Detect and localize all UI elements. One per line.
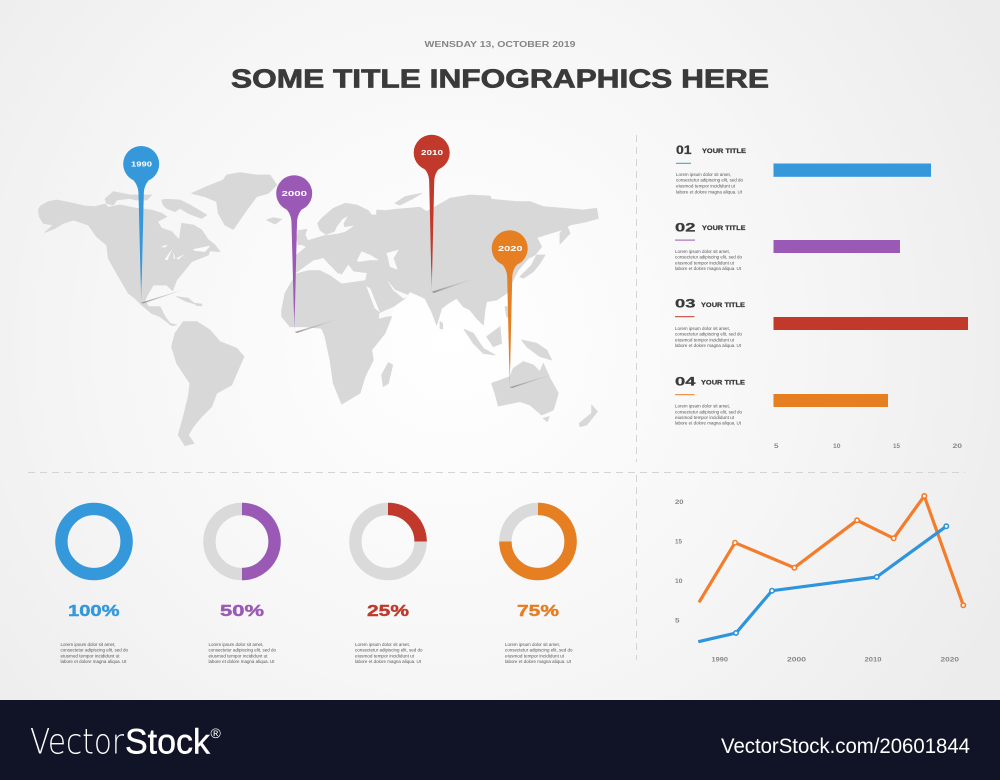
row 02: consectetur adipiscing elit, sed do bbox=[675, 255, 742, 260]
row 03: YOUR TITLE bbox=[701, 302, 746, 309]
row 02: labore et dolore magna aliqua. Ut bbox=[675, 266, 742, 271]
y axis labels: 5 bbox=[675, 618, 680, 624]
y axis labels: 10 bbox=[675, 579, 683, 585]
row 04: 04 bbox=[675, 376, 696, 388]
y axis labels bbox=[675, 500, 684, 624]
donut: 100%: Lorem ipsum dolor sit amet, bbox=[60, 642, 116, 647]
row 03: labore et dolore magna aliqua. Ut bbox=[675, 343, 742, 348]
donut: 50%: labore et dolore magna aliqua. Ut bbox=[208, 659, 275, 664]
y axis labels: 15 bbox=[675, 540, 683, 546]
footer id: VectorStock.com/20601844 bbox=[721, 735, 970, 758]
row 03: consectetur adipiscing elit, sed do bbox=[675, 332, 742, 337]
donut: 50%: consectetur adipiscing elit, sed do bbox=[208, 648, 276, 653]
footer logo: Vector bbox=[30, 722, 125, 762]
donut: 100% bbox=[60, 509, 128, 664]
row 02: eiusmod tempor incididunt ut bbox=[675, 260, 735, 265]
row 01: eiusmod tempor incididunt ut bbox=[676, 183, 736, 188]
row 02: YOUR TITLE bbox=[702, 225, 746, 232]
americas and greenland bbox=[38, 173, 282, 446]
donut: 50% bbox=[208, 509, 276, 664]
x axis labels: 2010 bbox=[864, 658, 882, 664]
donut: 25%: eiusmod tempor incididunt ut bbox=[355, 653, 415, 658]
pin: 2010: 2010 bbox=[421, 148, 443, 157]
pin: 2020: 2020 bbox=[498, 244, 522, 253]
orange series bbox=[699, 494, 966, 608]
eurasia africa and oceania bbox=[282, 193, 598, 427]
donut: 75% bbox=[505, 509, 573, 664]
row 01: labore et dolore magna aliqua. Ut bbox=[676, 189, 743, 194]
footer logo: Stock bbox=[125, 722, 210, 761]
donut: 100%: consectetur adipiscing elit, sed do bbox=[60, 648, 128, 653]
donut: 100%: labore et dolore magna aliqua. Ut bbox=[60, 659, 127, 664]
row 04: Lorem ipsum dolor sit amet, bbox=[675, 403, 730, 408]
donut: 25%: 25% bbox=[367, 603, 410, 620]
eurasia and africa landmass bbox=[282, 195, 598, 404]
title: SOME TITLE INFOGRAPHICS HERE bbox=[231, 65, 769, 93]
bar axis: 20 bbox=[952, 444, 963, 450]
blue series bbox=[698, 524, 948, 642]
donut: 50%: 50% bbox=[220, 603, 265, 620]
row 01: consectetur adipiscing elit, sed do bbox=[676, 178, 743, 183]
footer logo bbox=[30, 722, 222, 762]
row 03: Lorem ipsum dolor sit amet, bbox=[675, 326, 730, 331]
row 01: 01 bbox=[676, 145, 692, 157]
footer bar bbox=[0, 700, 1000, 780]
x axis labels: 2000 bbox=[787, 658, 807, 664]
inland seas bbox=[296, 217, 410, 318]
donut: 25%: Lorem ipsum dolor sit amet, bbox=[355, 642, 410, 647]
date line: WENSDAY 13, OCTOBER 2019 bbox=[424, 40, 576, 49]
row 01 bbox=[676, 145, 931, 194]
donut: 25%: consectetur adipiscing elit, sed do bbox=[355, 648, 423, 653]
donut: 75%: consectetur adipiscing elit, sed do bbox=[505, 648, 573, 653]
donut: 75%: 75% bbox=[517, 603, 560, 620]
x axis labels: 2020 bbox=[940, 658, 960, 664]
bar axis: 5 bbox=[774, 444, 779, 450]
footer logo: ® bbox=[210, 725, 222, 741]
pin: 2000: 2000 bbox=[282, 189, 307, 198]
x axis labels: 1990 bbox=[712, 658, 729, 664]
donut: 25%: labore et dolore magna aliqua. Ut bbox=[355, 659, 422, 664]
donut: 25% bbox=[355, 509, 423, 664]
pin: 1990 bbox=[123, 146, 159, 303]
pin: 2010 bbox=[414, 135, 450, 292]
bar axis bbox=[774, 444, 963, 450]
pin: 2020 bbox=[492, 230, 528, 387]
y axis labels: 20 bbox=[675, 500, 684, 506]
pin shadows bbox=[141, 278, 552, 388]
pin: 1990: 1990 bbox=[131, 160, 152, 168]
row 04: eiusmod tempor incididunt ut bbox=[675, 415, 735, 420]
bar axis: 10 bbox=[833, 444, 841, 450]
row 02: 02 bbox=[675, 222, 696, 234]
row 04: labore et dolore magna aliqua. Ut bbox=[675, 421, 742, 426]
row 03: eiusmod tempor incididunt ut bbox=[675, 337, 735, 342]
donut: 100%: eiusmod tempor incididunt ut bbox=[60, 653, 120, 658]
row 02: Lorem ipsum dolor sit amet, bbox=[675, 249, 730, 254]
donut: 50%: Lorem ipsum dolor sit amet, bbox=[208, 642, 264, 647]
row 03: 03 bbox=[675, 298, 696, 310]
world map bbox=[38, 173, 598, 446]
pin: 2000 bbox=[276, 175, 312, 332]
donut: 75%: eiusmod tempor incididunt ut bbox=[505, 653, 565, 658]
row 02 bbox=[675, 222, 900, 271]
donut: 50%: eiusmod tempor incididunt ut bbox=[208, 653, 268, 658]
donut: 75%: labore et dolore magna aliqua. Ut bbox=[505, 659, 572, 664]
x axis labels bbox=[712, 658, 960, 664]
islands bbox=[326, 258, 338, 273]
row 04: YOUR TITLE bbox=[701, 380, 746, 386]
bar axis: 15 bbox=[893, 444, 901, 450]
row 04 bbox=[675, 376, 888, 426]
donut: 100%: 100% bbox=[68, 603, 120, 620]
row 03 bbox=[675, 298, 968, 348]
line chart bbox=[675, 494, 966, 664]
row 01: YOUR TITLE bbox=[702, 148, 747, 155]
donut: 75%: Lorem ipsum dolor sit amet, bbox=[505, 642, 560, 647]
row 01: Lorem ipsum dolor sit amet, bbox=[676, 172, 731, 177]
panel: ranked list and bars bbox=[675, 145, 968, 450]
row 04: consectetur adipiscing elit, sed do bbox=[675, 409, 742, 414]
